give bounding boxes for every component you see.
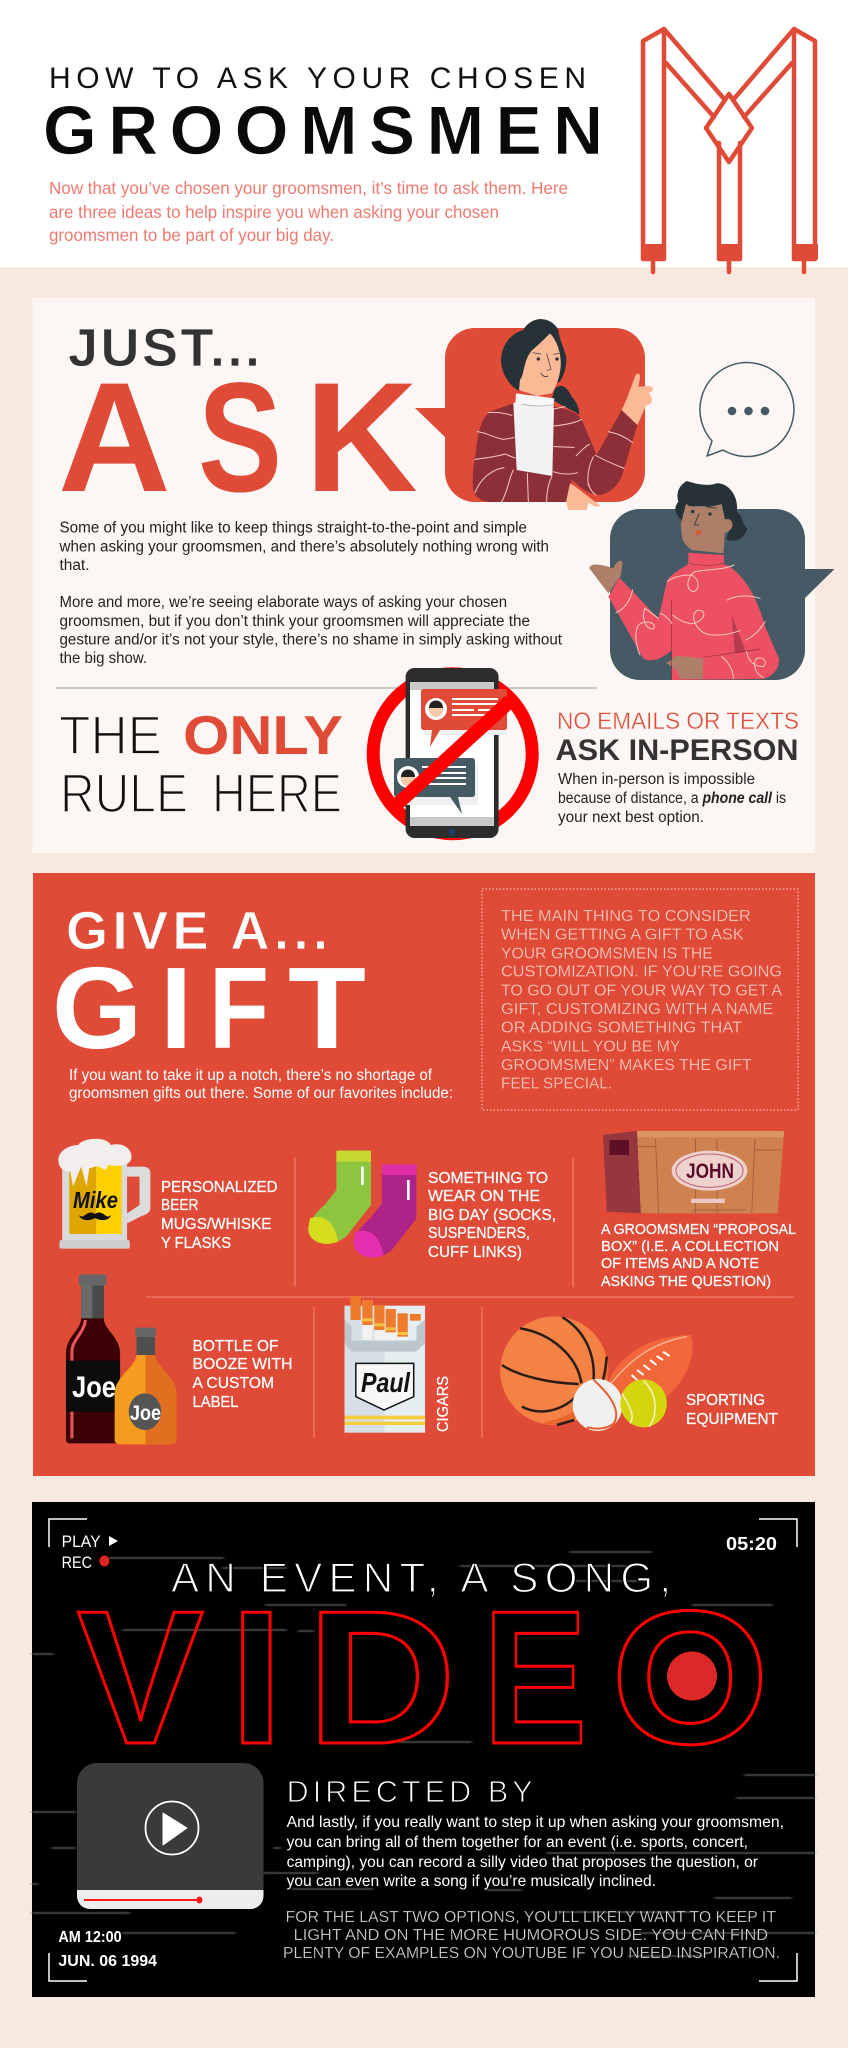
callout: customization: GIFT, CUSTOMIZING WITH A NAME [501,1001,773,1018]
item: bottles: Joe [72,1371,116,1404]
label: socks: SOMETHING TO [428,1170,548,1187]
label: proposal box [601,1221,796,1290]
camera frame corners [49,1519,797,1981]
callout: no emails or texts: When in-person is impossible [558,771,755,788]
heading: video: I [230,1572,283,1784]
heading: video: D [307,1572,456,1784]
callout: customization: THE MAIN THING TO CONSIDER [501,908,751,925]
label: bottle of booze: A CUSTOM [192,1375,274,1392]
label: proposal box: OF ITEMS AND A NOTE [601,1255,759,1272]
item: proposal box [603,1131,784,1213]
body text: the big show. [60,650,147,667]
heading: an event, a song: AN EVENT, A SONG, [171,1554,671,1601]
item: socks [308,1151,416,1258]
item: bottles: Joe [130,1402,161,1425]
heading: the only rule here: HERE [212,762,342,824]
label: beer mugs: BEER [161,1197,198,1214]
item: beer mug [58,1139,150,1249]
label: time stamp: AM 12:00 [58,1929,122,1946]
label: proposal box: BOX” (I.E. A COLLECTION [601,1238,779,1255]
intro text [69,1067,453,1102]
note text [283,1909,780,1962]
heading: video [77,1572,769,1784]
label: cigars: CIGARS [435,1376,452,1432]
label: date stamp: JUN. 06 1994 [58,1953,157,1970]
intro text [49,178,568,245]
intro text: Now that you’ve chosen your groomsmen, it’s time to ask them. Here [49,178,568,198]
label: socks: CUFF LINKS) [428,1244,522,1261]
heading: gift: F [209,943,269,1073]
heading: ask: S [198,351,282,525]
body text: gesture and/or it’s not your style, there’s no shame in simply asking without [60,632,563,648]
label: bottle of booze: BOTTLE OF [192,1338,278,1355]
body text [287,1814,784,1890]
body text: when asking your groomsmen, and there’s absolutely nothing wrong with [59,538,549,556]
item: proposal box: JOHN [686,1160,734,1183]
callout: customization: GROOMSMEN” MAKES THE GIFT [501,1057,752,1074]
heading: directed by: DIRECTED BY [287,1775,533,1809]
body text: you can bring all of them together for an event (i.e. sports, concert, [287,1834,748,1851]
intro text: groomsmen gifts out there. Some of our favorites include: [69,1085,453,1102]
heading: ask: K [305,351,418,525]
icon: no phone [373,668,532,838]
callout: customization [482,889,798,1110]
intro text: are three ideas to help inspire you when asking your chosen [49,202,499,222]
body text: More and more, we’re seeing elaborate ways of asking your chosen [60,594,507,611]
label: sporting equipment [686,1392,779,1428]
intro text: If you want to take it up a notch, there’s no shortage of [69,1067,433,1084]
header [43,29,818,272]
callout: no emails or texts: because of distance, a phone call is [558,790,786,807]
label: socks: WEAR ON THE [428,1188,540,1205]
heading: video: E [483,1572,587,1784]
body text: you can even write a song if you’re musically inclined. [287,1873,656,1890]
label: timecode: 05:20 [726,1534,777,1554]
item: sports balls [500,1316,693,1431]
callout: customization: TO GO OUT OF YOUR WAY TO GET A [501,982,782,999]
label: proposal box: A GROOMSMEN “PROPOSAL [601,1221,796,1238]
illustration: man talking [589,481,779,680]
heading: gift: T [288,943,366,1073]
heading: the only rule here: ONLY [183,704,343,766]
heading: the only rule here: RULE [60,762,188,824]
label: beer mugs: Y FLASKS [161,1235,231,1252]
label: bottle of booze: BOOZE WITH [192,1356,292,1373]
heading: gift: I [160,943,192,1073]
body text: camping), you can record a silly video that proposes the question, or [287,1854,758,1871]
icon: video player [77,1763,264,1909]
heading: the only rule here: THE [59,704,162,766]
icon: moustache [79,1212,111,1220]
callout: customization: CUSTOMIZATION. IF YOU’RE GOING [501,964,782,981]
note text: FOR THE LAST TWO OPTIONS, YOU’LL LIKELY WANT TO KEEP IT [286,1909,777,1926]
heading: video: O [611,1572,769,1784]
heading: the only rule here [59,704,343,824]
callout: customization: FEEL SPECIAL. [501,1076,612,1093]
label: proposal box: ASKING THE QUESTION) [601,1273,771,1290]
item: beer mug: Mike [73,1187,118,1213]
title line 1: HOW TO ASK YOUR CHOSEN [49,62,586,95]
label: bottle of booze [192,1338,292,1411]
panel: just ask [32,298,834,853]
body text: groomsmen, but if you don’t think your groomsmen will appreciate the [60,613,530,630]
panel: give a gift [33,873,815,1476]
label: beer mugs: MUGS/WHISKE [161,1216,272,1233]
note text: LIGHT AND ON THE MORE HUMOROUS SIDE. YOU CAN FIND [294,1927,768,1944]
label: beer mugs: PERSONALIZED [161,1179,278,1196]
icon: thought bubble [700,363,794,457]
callout: no emails or texts: your next best option. [558,809,704,826]
callout: no emails or texts: NO EMAILS OR TEXTS [557,708,799,735]
item: cigars pack [344,1296,425,1433]
label: play: PLAY [62,1533,101,1551]
label: bottle of booze: LABEL [192,1394,239,1411]
item: cigars pack: Paul [361,1367,411,1398]
illustration: woman talking [473,319,653,510]
callout: customization: YOUR GROOMSMEN IS THE [501,945,713,962]
body text: that. [60,557,90,574]
item: bottles [66,1274,176,1444]
title line 2: GROOMSMEN [43,92,603,169]
label: beer mugs [161,1179,278,1252]
callout: customization: OR ADDING SOMETHING THAT [501,1020,742,1037]
speech bubble: red [415,328,645,502]
body text [59,520,563,667]
label: sporting equipment: SPORTING [686,1392,765,1409]
callout: no emails or texts [556,708,799,826]
callout: customization: WHEN GETTING A GIFT TO ASK [501,927,744,944]
body text: And lastly, if you really want to step it up when asking your groomsmen, [287,1814,784,1831]
speech bubble: grey [610,509,834,680]
label: sporting equipment: EQUIPMENT [686,1411,779,1428]
body text: Some of you might like to keep things straight-to-the-point and simple [60,520,527,536]
heading: just: JUST... [68,318,260,378]
callout: no emails or texts: ASK IN-PERSON [556,734,798,767]
icon: suspenders M [641,29,818,272]
heading: give a: GIVE A... [66,901,328,961]
heading: ask: A [58,351,171,525]
intro text: groomsmen to be part of your big day. [49,225,334,245]
heading: gift: G [52,943,142,1073]
note text: PLENTY OF EXAMPLES ON YOUTUBE IF YOU NEED INSPIRATION. [283,1945,780,1962]
label: socks [428,1170,556,1261]
heading: video: V [77,1572,204,1784]
label: rec: REC [62,1554,92,1572]
callout: customization: ASKS “WILL YOU BE MY [501,1038,681,1055]
label: socks: SUSPENDERS, [428,1225,530,1242]
panel: video [32,1502,815,1997]
label: socks: BIG DAY (SOCKS, [428,1207,556,1224]
